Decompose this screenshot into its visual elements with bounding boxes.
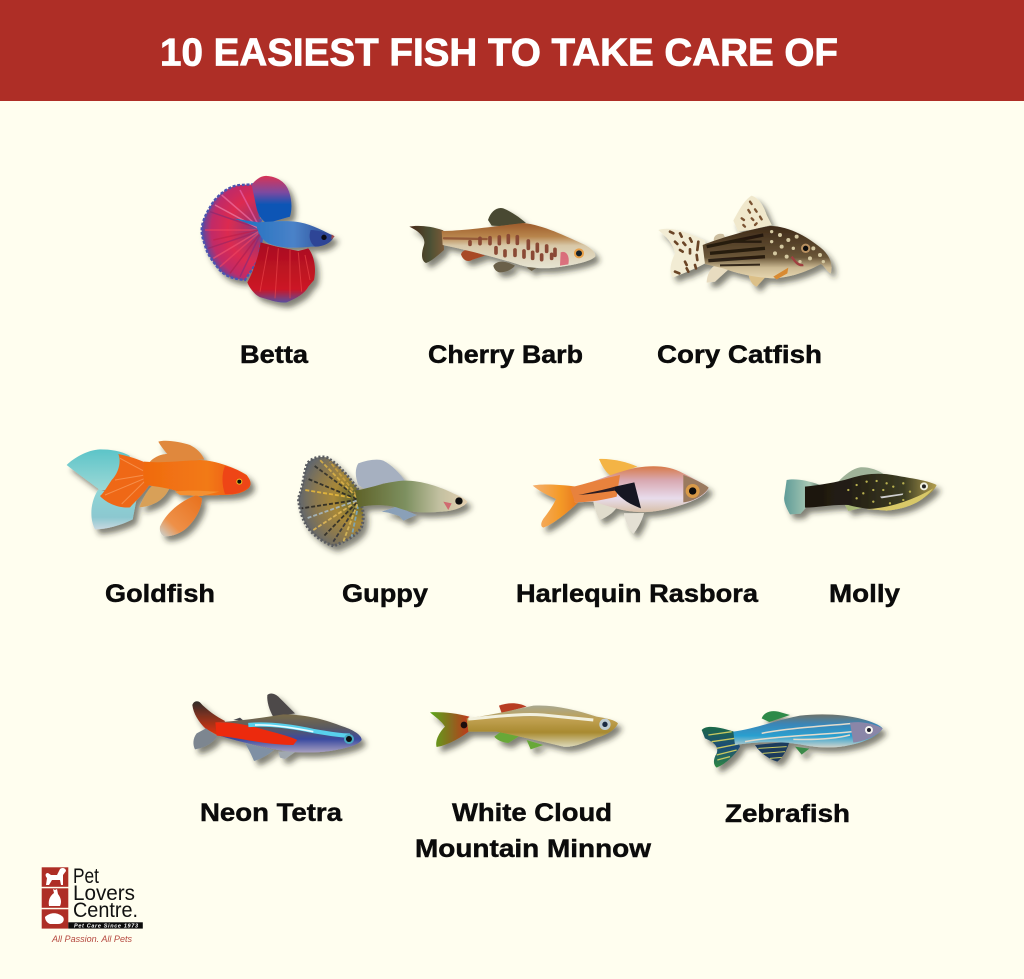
cory pectoral fin and eye (773, 244, 810, 279)
goldfish lower tail (91, 489, 137, 529)
logo slogan: All Passion. All Pets (51, 934, 132, 945)
logo tagline bar: Pet Care Since 1973 (74, 924, 138, 930)
logo icon: poodle (42, 867, 68, 887)
cherry barb body (442, 223, 595, 268)
label: Cherry Barb: Cherry Barb (428, 341, 583, 369)
logo wordmark (73, 865, 138, 922)
fish: harlequin rasbora (533, 459, 709, 534)
zebrafish body stripes (745, 723, 853, 742)
neon upper tail (192, 701, 225, 736)
molly belly and eye (867, 482, 933, 511)
cherry barb tail (409, 226, 444, 263)
neon blue stripe (248, 725, 350, 736)
fish: cory catfish (658, 196, 832, 287)
goldfish tail rays (105, 458, 146, 504)
minnow tail (430, 712, 469, 747)
betta body (233, 218, 334, 248)
betta head and eye (310, 230, 334, 247)
cherry barb dorsal fin (488, 208, 526, 226)
goldfish head and eye (175, 466, 250, 496)
logo icon: cat (42, 888, 68, 908)
minnow silver stripe (468, 715, 593, 720)
betta tail rays (205, 190, 260, 277)
label: Goldfish: Goldfish (105, 580, 215, 608)
harlequin dorsal fin (599, 459, 637, 476)
fish: goldfish (67, 441, 251, 536)
molly dorsal fin (838, 467, 884, 482)
zebrafish head and eye (850, 722, 883, 743)
harlequin dark line (578, 487, 615, 495)
cherry barb markings (444, 236, 555, 260)
molly lower fins (845, 505, 870, 511)
label: White Cloud Mountain Minnow (415, 799, 652, 863)
cherry barb gill and eye (560, 248, 584, 266)
minnow eye (599, 719, 611, 730)
label: White Cloud Mountain Minnow: White Cloud (452, 799, 612, 827)
harlequin tail (533, 484, 578, 528)
fish: cherry barb (409, 208, 595, 272)
cory dorsal spots (742, 202, 762, 227)
harlequin orange streak (570, 475, 620, 502)
fish: neon tetra (192, 693, 362, 761)
harlequin body (572, 466, 709, 512)
guppy tail fan (298, 457, 363, 546)
zebrafish tail (702, 727, 740, 768)
neon eye (344, 734, 354, 744)
betta anal fin (247, 242, 315, 303)
fish: guppy (298, 457, 467, 546)
goldfish upper tail (67, 449, 130, 490)
cory tail spots (670, 232, 698, 273)
goldfish ventral fin (160, 495, 202, 536)
goldfish body (143, 460, 251, 495)
molly speckles (847, 480, 911, 504)
minnow lower fins (494, 732, 543, 749)
betta tail fan (202, 184, 262, 280)
title banner (0, 0, 1024, 101)
goldfish orange tail (100, 454, 149, 507)
betta anal rays (260, 247, 310, 298)
logo wordmark: Pet (73, 865, 99, 888)
neon body (217, 714, 362, 753)
guppy gill and eye (443, 497, 463, 510)
logo wordmark: Lovers (73, 882, 135, 905)
neon lower fins (233, 718, 297, 761)
harlequin black wedge (615, 482, 641, 508)
cory dorsal fin (733, 196, 772, 232)
fish: molly (784, 467, 937, 514)
title: 10 EASIEST FISH TO TAKE CARE OF (160, 32, 838, 74)
label: Harlequin Rasbora: Harlequin Rasbora (516, 580, 759, 608)
zebrafish body (733, 714, 883, 747)
zebrafish dorsal fin (762, 711, 790, 722)
guppy dorsal fin (356, 460, 405, 489)
zebrafish tail stripes (708, 732, 738, 760)
logo: Pet Lovers Centre (42, 865, 143, 945)
guppy tail rays (302, 460, 358, 542)
label: Zebrafish: Zebrafish (725, 800, 850, 828)
cory body (703, 226, 832, 278)
logo icon: rodent (42, 909, 68, 929)
cory body stripes (707, 235, 765, 265)
minnow body (467, 705, 618, 747)
label: Neon Tetra: Neon Tetra (200, 799, 343, 827)
label: White Cloud Mountain Minnow: Mountain Minnow (415, 835, 652, 863)
neon lower tail (193, 728, 217, 749)
fish: white cloud mountain minnow (430, 703, 618, 749)
label: Molly: Molly (829, 580, 900, 608)
goldfish dorsal fin (148, 441, 204, 464)
cherry barb lower fins (461, 250, 540, 272)
fish: zebrafish (702, 711, 883, 768)
fish: betta (202, 176, 335, 303)
betta dorsal fin (252, 176, 291, 223)
molly tail (784, 479, 820, 514)
logo wordmark: Centre. (73, 899, 138, 922)
molly body (805, 474, 937, 510)
cory lower fins (707, 234, 767, 287)
label: Guppy: Guppy (342, 580, 428, 608)
label: Cory Catfish: Cory Catfish (657, 341, 822, 369)
cory tail (658, 229, 708, 277)
neon dorsal fin (267, 693, 295, 717)
minnow dorsal fin (499, 703, 527, 713)
neon red stripe (215, 722, 297, 745)
zebrafish anal fin (755, 742, 789, 762)
cory head spots (770, 230, 825, 263)
zebrafish small fin (795, 747, 809, 755)
goldfish back fin (139, 485, 169, 507)
harlequin head and eye (683, 475, 709, 502)
guppy ventral fins (382, 507, 417, 521)
harlequin lower fins (593, 502, 644, 534)
label: Betta: Betta (240, 341, 309, 369)
guppy body (355, 481, 467, 512)
